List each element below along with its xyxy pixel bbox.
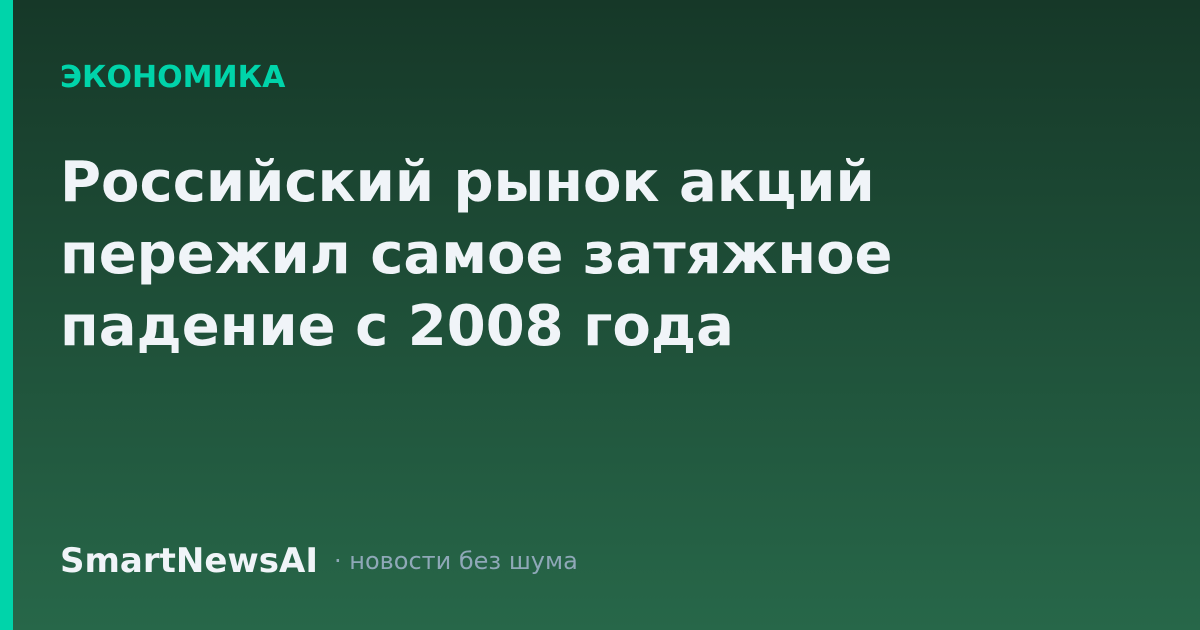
accent bar [0, 0, 13, 630]
headline: падение с 2008 года [60, 294, 734, 359]
headline: Российский рынок акций [60, 150, 875, 215]
headline [60, 150, 893, 359]
brand name: SmartNewsAI [60, 541, 318, 581]
category label: ЭКОНОМИКА [60, 60, 285, 95]
tagline: · новости без шума [334, 547, 578, 575]
headline: пережил самое затяжное [60, 222, 893, 287]
